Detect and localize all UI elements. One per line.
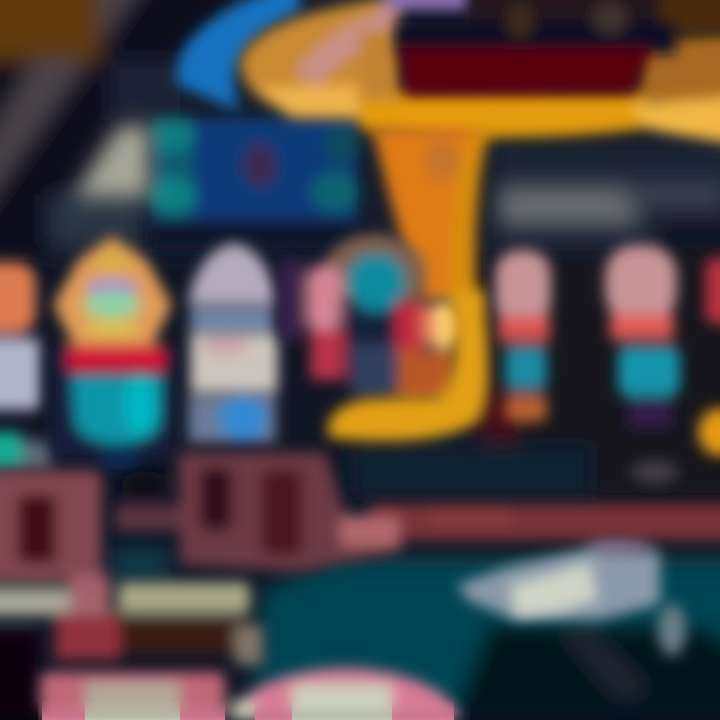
grey wall sign	[72, 125, 150, 198]
orange central column	[372, 128, 490, 310]
teal and blue sign panel	[148, 117, 360, 252]
chips at bottom	[40, 668, 460, 720]
teal gaming table	[110, 538, 720, 720]
right side machine bank backdrop	[350, 150, 720, 500]
slot machine two	[50, 236, 175, 470]
bottom edge colour fill	[0, 700, 720, 720]
slot machine four inside column	[280, 234, 464, 400]
dark top and maroon band of canopy	[396, 0, 720, 96]
white cards on table	[457, 546, 660, 620]
slot machine far left	[0, 262, 52, 470]
slot machine five	[495, 250, 551, 422]
blue neon arc	[176, 0, 300, 112]
background: upper wall and ceiling	[0, 0, 720, 260]
cream card highlight	[510, 541, 686, 656]
chip stacks in middle	[115, 452, 402, 572]
yellow canopy	[240, 0, 720, 152]
chip stacks at left	[0, 470, 263, 720]
yellow U base of column	[327, 290, 489, 441]
maroon table rail	[370, 504, 720, 540]
slot machine three	[188, 243, 278, 443]
slot machine far right	[631, 258, 720, 484]
slot machine six	[605, 245, 680, 428]
